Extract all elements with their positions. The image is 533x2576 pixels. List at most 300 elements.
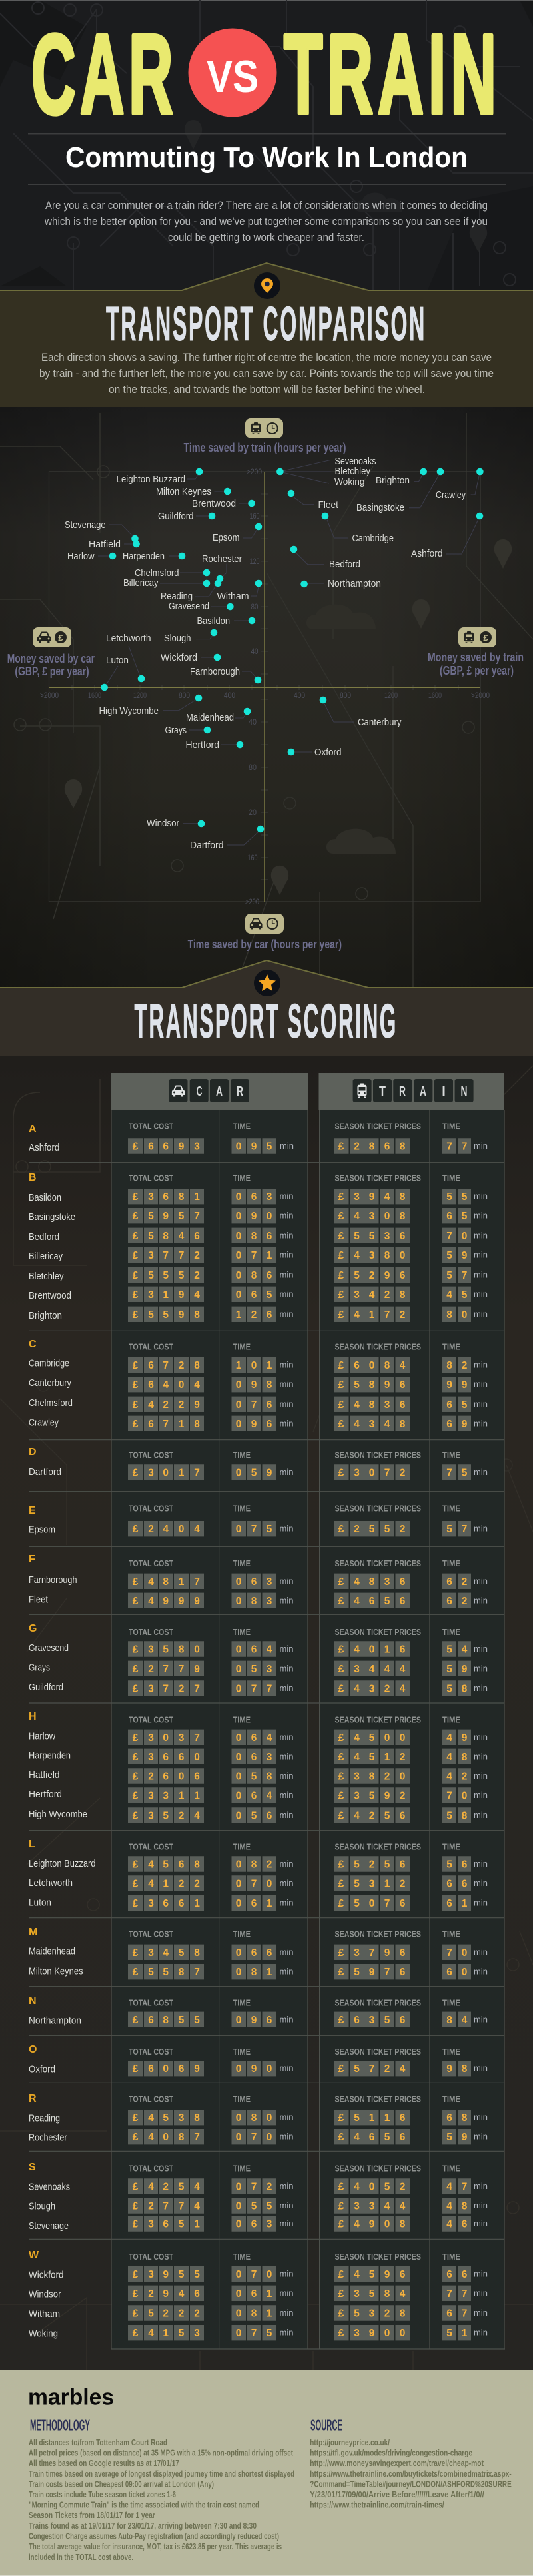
column headers: TIME: [233, 1122, 251, 1131]
row: Wickford: Wickford: [29, 2269, 64, 2280]
column headers: TIME: [442, 1628, 460, 1637]
point: Northampton: [300, 579, 381, 589]
text: chart explanation: on the tracks, and towards the bottom will be faster behind the wheel.: [109, 383, 425, 396]
subtitle: Commuting To Work In London: [65, 141, 468, 174]
column headers: SEASON TICKET PRICES: [334, 1343, 421, 1352]
axis title: money saved by car: Money saved by car: [7, 652, 95, 665]
point: Slough: [164, 629, 217, 644]
row: Epsom: 075: [236, 1524, 272, 1535]
point: Windsor: [147, 818, 205, 829]
point: Epsom: [213, 523, 262, 543]
title word: car: CAR: [31, 11, 177, 138]
column headers: TOTAL COST: [129, 1122, 173, 1131]
text: methodology notes: All petrol prices (based on distance) at 35 MPG with a 15% non-optimal driving offset: [29, 2448, 294, 2457]
row: Slough: 055: [236, 2200, 272, 2212]
row: Gravesend: £3580: [133, 1644, 200, 1656]
row: Hatfield: [29, 1768, 488, 1784]
row: Canterbury: [29, 1377, 488, 1392]
row: Woking: 075: [236, 2328, 272, 2339]
row: Northampton: [29, 2012, 488, 2027]
column headers: [129, 1999, 460, 2008]
row: Dartford: £3017: [133, 1468, 200, 1478]
point: Rochester: [202, 554, 242, 582]
column headers: [129, 2164, 460, 2174]
row: Woking: min: [280, 2328, 293, 2338]
row: Oxford: min: [280, 2063, 293, 2073]
point: Witham: Witham: [217, 591, 249, 602]
point: Luton: Luton: [106, 655, 129, 666]
row: Guildford: £4324: [338, 1684, 406, 1694]
intro paragraph: Are you a car commuter or a train rider? There are a lot of considerations when it comes to deciding: [45, 199, 488, 212]
row: Bedford: 70: [446, 1231, 467, 1242]
text: source links: https://tfl.gov.uk/modes/driving/congestion-charge: [310, 2448, 472, 2457]
row: Wickford: £3955: [133, 2269, 200, 2280]
row: Epsom: £2552: [338, 1524, 405, 1535]
axis title: time saved by car: Time saved by car (hours per year): [188, 938, 342, 951]
column headers: TOTAL COST: [129, 2095, 173, 2104]
axis labels: hours: 160: [248, 853, 258, 862]
section: S: [29, 2162, 488, 2232]
row: Bletchley: Bletchley: [29, 1271, 64, 1282]
row: Crawley: Crawley: [29, 1417, 59, 1428]
column headers: TOTAL COST: [129, 1343, 173, 1352]
row: Hatfield: 058: [236, 1771, 272, 1782]
point: Leighton Buzzard: [116, 468, 203, 485]
chart: time and money saved scatter: [7, 418, 524, 951]
section: M: [29, 1927, 488, 1979]
row: Farnborough: 063: [236, 1576, 272, 1588]
section: H: [29, 1711, 488, 1823]
row: Chelmsford: 65: [446, 1399, 468, 1411]
letter heading: M: M: [29, 1927, 37, 1938]
column headers: SEASON TICKET PRICES: [334, 1450, 421, 1460]
column headers: TIME: [233, 1174, 251, 1183]
point: Basildon: Basildon: [197, 616, 230, 627]
letter heading: C: C: [29, 1339, 37, 1350]
row: Gravesend: 54: [446, 1644, 468, 1656]
point: Canterbury: [320, 697, 402, 728]
row: Brighton: Brighton: [29, 1310, 62, 1321]
axis title: money saved by car: £: [58, 633, 63, 643]
point: Crawley: Crawley: [436, 490, 466, 501]
row: Wickford: [29, 2266, 488, 2282]
column headers: TIME: [442, 1343, 460, 1352]
point: Canterbury: Canterbury: [358, 717, 402, 728]
row: Leighton Buzzard: 56: [446, 1859, 468, 1870]
axis labels: money: 800: [179, 691, 190, 700]
row: Fleet: £4999: [133, 1596, 200, 1607]
panel: footer: SOURCE: [310, 2416, 342, 2433]
row: Maidenhead: 066: [236, 1947, 272, 1959]
row: Luton: £3661: [133, 1898, 200, 1909]
row: High Wycombe: min: [280, 1810, 293, 1820]
row: Dartford: min: [474, 1467, 488, 1477]
point: Fleet: Fleet: [318, 500, 338, 511]
row: Brentwood: min: [474, 1289, 488, 1299]
text: methodology notes: All times based on Google results as at 17/01/17: [29, 2458, 179, 2468]
column headers: TIME: [442, 1716, 460, 1725]
row: Ashford: 095: [236, 1141, 272, 1152]
point: Cambridge: Cambridge: [352, 533, 394, 544]
letter heading: N: N: [29, 1995, 37, 2007]
column headers: [129, 1174, 460, 1183]
row: Milton Keynes: [29, 1964, 488, 1979]
axis title: time saved by train: Time saved by train (hours per year): [184, 441, 346, 454]
row: Wickford: 070: [236, 2269, 272, 2280]
row: Brentwood: Brentwood: [29, 1290, 71, 1301]
row: Witham: min: [280, 2308, 293, 2318]
column headers: SEASON TICKET PRICES: [334, 2095, 421, 2104]
column headers: SEASON TICKET PRICES: [334, 1843, 421, 1852]
row: Brentwood: 065: [236, 1289, 272, 1301]
row: Wickford: min: [474, 2268, 488, 2278]
column headers: TIME: [233, 1504, 251, 1513]
row: Chelmsford: [29, 1397, 488, 1412]
column headers: TIME: [233, 2164, 251, 2174]
row: Chelmsford: £4836: [338, 1399, 406, 1411]
column headers: [129, 1122, 460, 1131]
row: Leighton Buzzard: min: [280, 1859, 293, 1869]
row: Maidenhead: 70: [446, 1947, 467, 1959]
row: Leighton Buzzard: min: [474, 1859, 488, 1869]
row: Hertford: £3311: [133, 1790, 200, 1802]
axis labels: hours: 40: [251, 647, 259, 656]
panel: footer: [0, 2370, 533, 2576]
row: Sevenoaks: [29, 2178, 488, 2194]
column headers: TIME: [233, 1716, 251, 1725]
row: Rochester: Rochester: [29, 2132, 67, 2144]
row: Crawley: min: [280, 1418, 293, 1428]
row: Harpenden: 48: [446, 1752, 468, 1763]
row: Guildford: 58: [446, 1684, 468, 1694]
row: Bletchley: 57: [446, 1270, 467, 1281]
text: methodology notes: [29, 2437, 294, 2562]
row: Grays: 053: [236, 1664, 272, 1675]
text: chart explanation: Each direction shows a saving. The further right of centre the location, the more money you can save: [41, 351, 492, 364]
point: Chelmsford: Chelmsford: [135, 568, 179, 579]
row: Gravesend: [29, 1641, 488, 1657]
row: Reading: £5116: [338, 2112, 406, 2124]
icon: star: [254, 970, 280, 996]
text: chart explanation: [39, 351, 494, 396]
axis labels: money: 400: [294, 691, 305, 700]
row: Canterbury: £5896: [338, 1379, 406, 1391]
row: Billericay: 071: [236, 1250, 272, 1261]
point: Billericay: [123, 578, 210, 589]
column headers: TOTAL COST: [129, 1559, 173, 1568]
letter heading: D: D: [29, 1447, 37, 1458]
row: Brentwood: £3428: [338, 1289, 406, 1301]
row: Leighton Buzzard: £5256: [338, 1859, 406, 1870]
row: Basingstoke: [29, 1208, 488, 1223]
row: Grays: £3444: [338, 1664, 406, 1675]
row: Brentwood: 45: [446, 1289, 468, 1301]
section: E: [29, 1504, 488, 1536]
row: Brighton: £4172: [338, 1309, 405, 1321]
row: Basingstoke: £5957: [133, 1211, 200, 1222]
point: Ashford: Ashford: [411, 549, 442, 559]
background: chart area: [0, 407, 533, 993]
row: Hatfield: Hatfield: [29, 1770, 60, 1781]
row: Basingstoke: 65: [446, 1211, 468, 1222]
table header: car: R: [237, 1084, 243, 1099]
row: Brentwood: min: [280, 1289, 293, 1299]
point: Luton: [101, 655, 129, 691]
letter heading: O: O: [29, 2044, 37, 2055]
letter heading: R: R: [29, 2093, 37, 2104]
row: Letchworth: £5312: [338, 1878, 405, 1890]
row: Farnborough: min: [280, 1576, 293, 1586]
row: Bletchley: £5552: [133, 1270, 200, 1281]
row: Oxford: 090: [236, 2063, 272, 2075]
text: methodology notes: included in the TOTAL cost above.: [29, 2552, 133, 2562]
row: Luton: £5076: [338, 1898, 406, 1909]
row: Bletchley: min: [280, 1269, 293, 1279]
letter heading: G: G: [29, 1623, 37, 1634]
row: Wickford: 66: [446, 2269, 468, 2280]
row: Harpenden: min: [474, 1751, 488, 1761]
column headers: TOTAL COST: [129, 1999, 173, 2008]
row: Cambridge: min: [474, 1360, 488, 1370]
point: Wickford: [161, 653, 221, 663]
column headers: [129, 1559, 460, 1568]
row: Billericay: 59: [446, 1250, 468, 1261]
row: Cambridge: Cambridge: [29, 1358, 69, 1369]
row: Hatfield: min: [474, 1771, 488, 1781]
row: Bedford: min: [474, 1230, 488, 1240]
row: Farnborough: min: [474, 1576, 488, 1586]
row: Fleet: £4656: [338, 1596, 406, 1607]
row: Dartford: 75: [446, 1468, 468, 1478]
row: Harlow: min: [280, 1732, 293, 1742]
text: methodology notes: All distances to/from Tottenham Court Road: [29, 2437, 167, 2447]
column headers: SEASON TICKET PRICES: [334, 1122, 421, 1131]
column headers: TOTAL COST: [129, 1929, 173, 1939]
section: F: [29, 1554, 488, 1608]
axis labels: hours: 20: [249, 808, 257, 817]
row: Brentwood: £3194: [133, 1289, 200, 1301]
point: Basildon: [197, 616, 255, 627]
letter heading: A: A: [29, 1124, 37, 1135]
row: Brighton: [29, 1307, 488, 1322]
row: Slough: min: [474, 2200, 488, 2210]
row: Hertford: Hertford: [29, 1789, 62, 1800]
row: Oxford: £6069: [133, 2063, 200, 2075]
row: Harlow: min: [474, 1732, 488, 1742]
table header: car: C: [196, 1084, 203, 1099]
row: Witham: [29, 2305, 488, 2321]
axis title: money saved by car: (GBP, £ per year): [15, 665, 89, 678]
column headers: [129, 1450, 460, 1460]
column headers: TOTAL COST: [129, 1843, 173, 1852]
row: Sevenoaks: min: [280, 2181, 293, 2191]
row: Dartford: 059: [236, 1468, 272, 1478]
point: Brentwood: Brentwood: [192, 499, 236, 509]
row: Ashford: min: [474, 1141, 488, 1151]
letter heading: F: F: [29, 1554, 35, 1565]
row: Hatfield: £3820: [338, 1771, 405, 1782]
row: Witham: £5222: [133, 2308, 200, 2319]
row: Maidenhead: £3458: [133, 1947, 200, 1959]
point: Fleet: [288, 490, 338, 511]
row: Farnborough: [29, 1574, 488, 1589]
axis title: time saved by train: [184, 418, 346, 454]
table: scoring grid: [29, 1073, 505, 2349]
point: Rochester: Rochester: [202, 554, 242, 565]
row: Canterbury: min: [280, 1379, 293, 1389]
row: Canterbury: 99: [446, 1379, 468, 1391]
icon: car: [172, 1086, 185, 1096]
intro paragraph: [44, 199, 488, 244]
column headers: [129, 1929, 460, 1939]
row: Windsor: min: [280, 2288, 293, 2298]
row: Wickford: min: [280, 2268, 293, 2278]
point: Reading: Reading: [161, 591, 193, 602]
row: Windsor: min: [474, 2288, 488, 2298]
point: Guildford: [158, 511, 215, 522]
row: High Wycombe: min: [474, 1810, 488, 1820]
section: C: [29, 1339, 488, 1431]
point: Harpenden: Harpenden: [123, 551, 165, 562]
row: Oxford: £5724: [338, 2063, 406, 2075]
row: Harpenden: £3660: [133, 1752, 200, 1763]
row: Billericay: £4380: [338, 1250, 405, 1261]
axis labels: hours: 120: [249, 557, 260, 566]
row: Epsom: min: [474, 1524, 488, 1534]
point: Leighton Buzzard: Leighton Buzzard: [116, 474, 185, 485]
column headers: [129, 1504, 460, 1513]
row: Crawley: 096: [236, 1419, 272, 1430]
row: Farnborough: 62: [446, 1576, 467, 1588]
letter heading: B: B: [29, 1172, 37, 1183]
axis labels: hours: 160: [249, 511, 260, 521]
column headers: TIME: [442, 1504, 460, 1513]
point: Slough: Slough: [164, 633, 191, 644]
point: Guildford: Guildford: [158, 511, 193, 522]
row: Epsom: [29, 1521, 488, 1536]
row: High Wycombe: 056: [236, 1810, 272, 1822]
row: Chelmsford: Chelmsford: [29, 1397, 73, 1409]
point: Bedford: [290, 546, 360, 570]
row: Luton: 061: [236, 1898, 272, 1909]
row: Slough: [29, 2198, 488, 2214]
row: Northampton: Northampton: [29, 2015, 81, 2026]
row: Billericay: min: [474, 1249, 488, 1259]
row: Witham: Witham: [29, 2308, 60, 2320]
row: Dartford: [29, 1464, 488, 1480]
axis labels: money: >2000: [40, 691, 59, 700]
point: Reading: [161, 580, 221, 602]
row: Hertford: min: [474, 1790, 488, 1800]
row: Rochester: 59: [446, 2132, 468, 2143]
column headers: SEASON TICKET PRICES: [334, 1929, 421, 1939]
row: Reading: min: [280, 2112, 293, 2122]
text: source links: https://www.thetrainline.com/train-times/: [310, 2500, 444, 2509]
row: Cambridge: [29, 1357, 488, 1373]
column headers: SEASON TICKET PRICES: [334, 2252, 421, 2262]
row: Crawley: min: [474, 1418, 488, 1428]
row: Stevenage: £4908: [338, 2219, 406, 2230]
row: Windsor: Windsor: [29, 2288, 61, 2300]
row: Letchworth: 070: [236, 1878, 272, 1890]
row: Sevenoaks: Sevenoaks: [29, 2182, 70, 2192]
row: Northampton: min: [280, 2014, 293, 2024]
row: High Wycombe: £4256: [338, 1810, 406, 1822]
column headers: SEASON TICKET PRICES: [334, 1504, 421, 1513]
column headers: SEASON TICKET PRICES: [334, 1999, 421, 2008]
row: Basingstoke: £4308: [338, 1211, 406, 1222]
table header: train: I: [442, 1084, 446, 1099]
column headers: SEASON TICKET PRICES: [334, 1174, 421, 1183]
column headers: SEASON TICKET PRICES: [334, 1628, 421, 1637]
row: Oxford: [29, 2061, 488, 2076]
row: Billericay: Billericay: [29, 1251, 63, 1262]
axis labels: money: 800: [340, 691, 351, 700]
row: Grays: Grays: [29, 1662, 50, 1673]
column headers: [129, 2252, 460, 2262]
text: source links: Y/23/01/17/09/00/Arrive Before//////Leave After/1/0//: [310, 2489, 484, 2499]
row: Fleet: min: [280, 1595, 293, 1605]
row: Guildford: Guildford: [29, 1682, 63, 1693]
row: Fleet: 62: [446, 1596, 467, 1607]
row: Canterbury: Canterbury: [29, 1377, 71, 1389]
row: Stevenage: 46: [446, 2219, 468, 2230]
section: A: [29, 1122, 488, 1154]
row: Milton Keynes: min: [280, 1967, 293, 1977]
row: Basildon: Basildon: [29, 1192, 61, 1203]
axis labels: money: 1200: [133, 691, 147, 700]
letter heading: W: W: [29, 2250, 39, 2261]
column headers: [129, 2047, 460, 2057]
point: Hertford: Hertford: [185, 740, 219, 751]
row: Cambridge: £6084: [338, 1360, 406, 1371]
row: Harpenden: min: [280, 1751, 293, 1761]
section: N: [29, 1995, 488, 2027]
row: Northampton: £6855: [133, 2015, 200, 2026]
text: methodology notes: The total average value for insurance, MOT, tax is £623.85 per year. This average is: [29, 2541, 282, 2551]
row: Reading: 68: [446, 2112, 468, 2124]
column headers: TOTAL COST: [129, 2252, 173, 2262]
row: Fleet: Fleet: [29, 1594, 49, 1605]
row: Leighton Buzzard: £4568: [133, 1859, 200, 1870]
text: methodology notes: "Morning Commute Train" is the time associated with the train cost named: [29, 2500, 259, 2509]
point: Chelmsford: [135, 568, 210, 579]
row: Billericay: [29, 1247, 488, 1263]
point: Dartford: Dartford: [190, 840, 224, 851]
point: Maidenhead: Maidenhead: [186, 713, 234, 723]
row: Woking: £4153: [133, 2328, 200, 2339]
row: Basildon: 55: [446, 1191, 468, 1203]
row: Northampton: 096: [236, 2015, 272, 2026]
row: Milton Keynes: min: [474, 1967, 488, 1977]
row: Fleet: min: [474, 1595, 488, 1605]
table header: car: A: [216, 1084, 223, 1099]
point: Basingstoke: Basingstoke: [356, 503, 404, 513]
row: Milton Keynes: 081: [236, 1967, 272, 1978]
row: Hertford: [29, 1787, 488, 1803]
row: Slough: £2774: [133, 2200, 200, 2212]
column headers: TIME: [233, 2252, 251, 2262]
row: Luton: Luton: [29, 1897, 51, 1909]
row: Ashford: [29, 1138, 488, 1154]
row: Reading: min: [474, 2112, 488, 2122]
section: B: [29, 1172, 488, 1322]
column headers: TIME: [233, 1999, 251, 2008]
intro paragraph: could be getting to work cheaper and faster.: [168, 231, 364, 244]
row: Bedford: £5846: [133, 1231, 200, 1242]
panel: footer: METHODOLOGY: [30, 2416, 90, 2433]
point: Stevenage: [65, 520, 139, 542]
